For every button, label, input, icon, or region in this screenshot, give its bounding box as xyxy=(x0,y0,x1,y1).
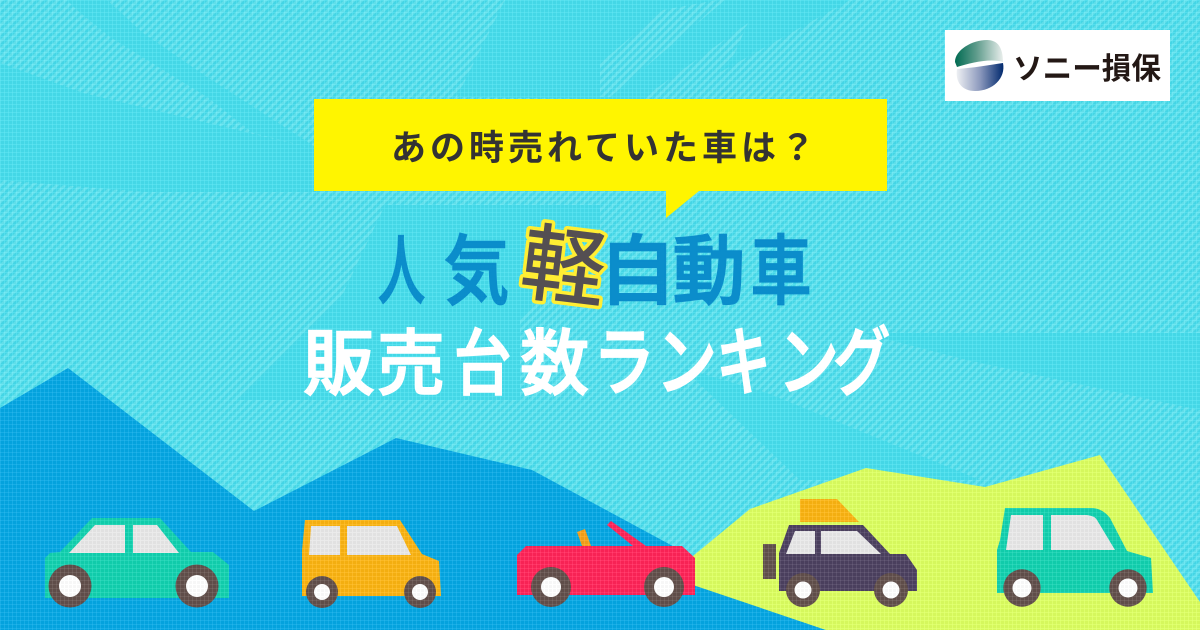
car: red convertible xyxy=(517,521,695,607)
blue mountains xyxy=(0,368,826,630)
title line 2: キ xyxy=(716,320,771,405)
title line 1: 気 xyxy=(444,230,509,315)
title line 2: 台 xyxy=(454,324,511,404)
title line 2: グ xyxy=(833,322,890,406)
title line 2: ン xyxy=(656,321,717,405)
title line 1: 人 xyxy=(378,231,425,315)
logo wordmark: ソニー損保 xyxy=(1013,53,1161,86)
car: dark SUV with roof load xyxy=(763,499,917,607)
title line 2: ラ xyxy=(593,320,655,405)
title line 2: 売 xyxy=(377,324,445,404)
title line 1: 自 xyxy=(599,231,676,315)
car: teal sedan xyxy=(45,518,229,608)
logo: Sony Sonpo xyxy=(945,30,1170,101)
title line 2 xyxy=(303,320,890,406)
title line 1: 動 xyxy=(673,230,745,314)
title line 1 xyxy=(378,215,811,319)
car: yellow minivan xyxy=(302,520,441,608)
title line 2: ン xyxy=(778,321,839,405)
title line 2: 販 xyxy=(303,325,375,405)
highlighted character: 軽 xyxy=(516,215,611,319)
title line 1: 車 xyxy=(751,230,811,315)
bubble text: あの時売れていた車は？ xyxy=(391,129,819,168)
logo mark xyxy=(955,40,1003,91)
title line 2: 数 xyxy=(520,324,589,404)
green hill xyxy=(693,455,1200,630)
speech bubble xyxy=(314,99,887,218)
car: teal wagon xyxy=(997,508,1153,607)
